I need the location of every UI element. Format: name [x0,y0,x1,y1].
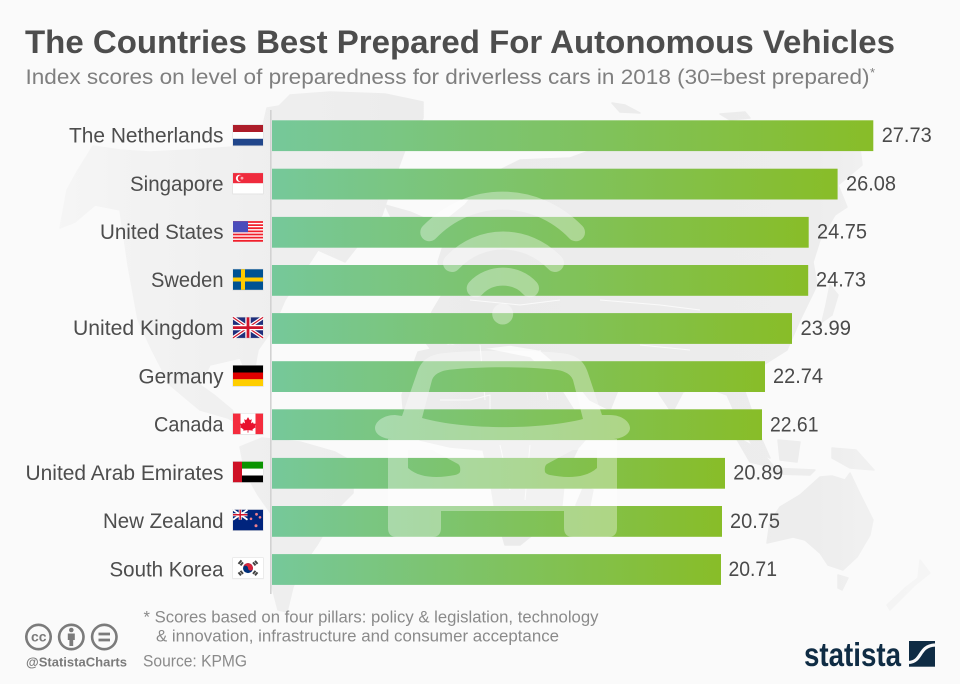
value labels: 20.89 [733,460,783,484]
icon: flag Canada [232,413,264,435]
value labels: 20.71 [728,557,777,581]
country labels: The Netherlands [69,124,224,148]
icon: flag South Korea [232,557,264,579]
footnote [144,609,599,646]
value labels: 27.73 [882,123,932,147]
bar: Canada [272,409,762,440]
bar: Germany [272,361,765,392]
background world map [60,92,930,612]
icon: flag New Zealand [232,509,264,531]
icon: flag United States [233,221,263,242]
value labels: 24.75 [817,220,867,244]
icon: creative commons licence: cc [31,630,47,644]
bar: United Kingdom [272,313,792,344]
country labels: Singapore [130,172,224,196]
country labels: United States [100,220,224,244]
value labels: 22.61 [770,412,818,436]
subtitle: * [870,65,875,80]
subtitle: Index scores on level of preparedness for driverless cars in 2018 (30=best prepared) [26,65,870,89]
bar: The Netherlands [272,120,873,151]
bar chart [272,120,873,585]
country labels: South Korea [110,557,224,581]
icon: flag Singapore [232,173,264,194]
handle: @StatistaCharts [26,655,127,670]
country labels: New Zealand [103,509,224,533]
value labels: 22.74 [773,364,823,388]
country labels: Germany [138,364,224,388]
footnote: * Scores based on four pillars: policy & legislation, technology [144,609,599,627]
icon: flag United Arab Emirates [232,461,264,483]
source: Source: KPMG [143,653,247,671]
icon: flag United Kingdom [232,317,264,339]
bar: Sweden [272,265,808,296]
logo: statista: statista [804,637,901,674]
icon: wifi signal [429,201,576,324]
icon: car [375,351,630,537]
value labels: 26.08 [846,172,896,196]
value labels: 24.73 [816,268,866,292]
icon: flag Sweden [232,269,264,290]
value labels [728,123,932,581]
icon: creative commons licence [26,625,117,649]
icon: connected car overlay [375,201,630,537]
value labels: 23.99 [800,316,851,340]
bar: South Korea [272,554,721,585]
icon: flag The Netherlands [232,124,264,146]
footnote: & innovation, infrastructure and consumer acceptance [156,628,559,646]
country labels: United Kingdom [73,316,224,340]
country labels: Sweden [151,268,224,292]
bar: Singapore [272,169,838,200]
bar: United States [272,217,809,248]
country labels: Canada [154,413,224,437]
country labels [26,124,224,581]
icon: flag Germany [232,365,264,387]
bar: United Arab Emirates [272,458,725,489]
title: The Countries Best Prepared For Autonomous Vehicles [25,24,895,60]
bar: New Zealand [272,506,722,537]
axis line [270,110,272,594]
value labels: 20.75 [730,509,780,533]
country labels: United Arab Emirates [26,461,224,485]
